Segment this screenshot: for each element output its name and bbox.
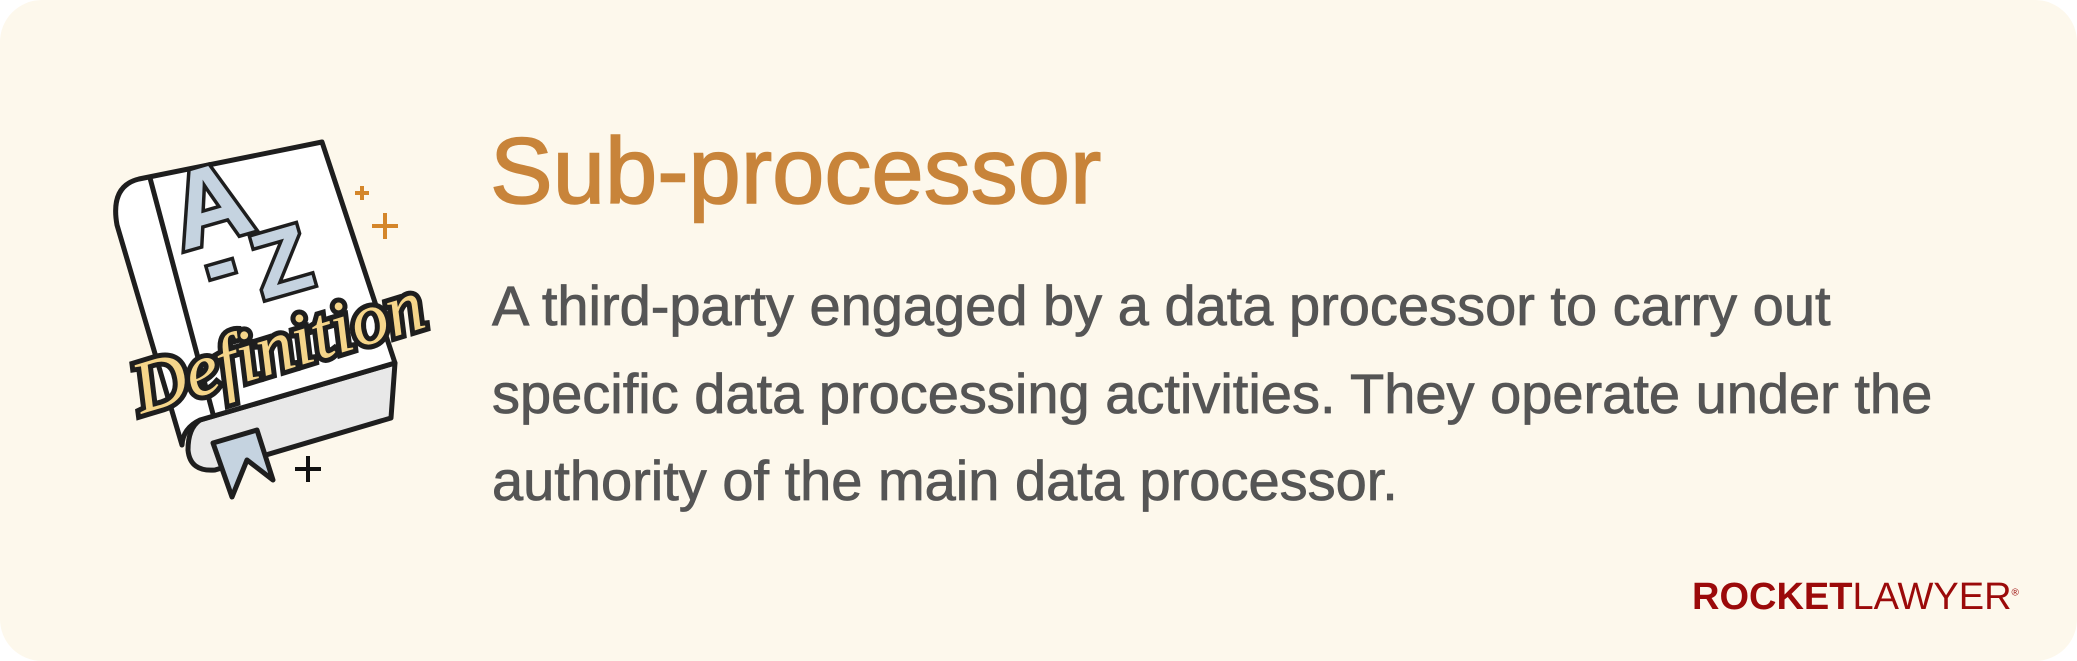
definition text: specific data processing activities. They operate under the [492, 362, 1932, 424]
letters A-Z: - [189, 207, 249, 318]
definition text: authority of the main data processor. [492, 449, 1398, 512]
logo: ROCKETLAWYER® [1692, 576, 2019, 618]
pages block [188, 363, 395, 470]
letters A-Z: Z [240, 205, 323, 319]
cover [116, 142, 395, 445]
icon: definition book [113, 135, 433, 500]
definition text: A third-party engaged by a data processor to carry out [492, 274, 1831, 337]
bookmark [213, 430, 273, 497]
definition text [492, 274, 1932, 512]
title: Sub-processor [490, 118, 1101, 223]
sparkles [355, 186, 398, 239]
Definition script: Definition [122, 264, 433, 430]
letters A-Z [155, 135, 323, 319]
letters A-Z: A [155, 135, 264, 273]
